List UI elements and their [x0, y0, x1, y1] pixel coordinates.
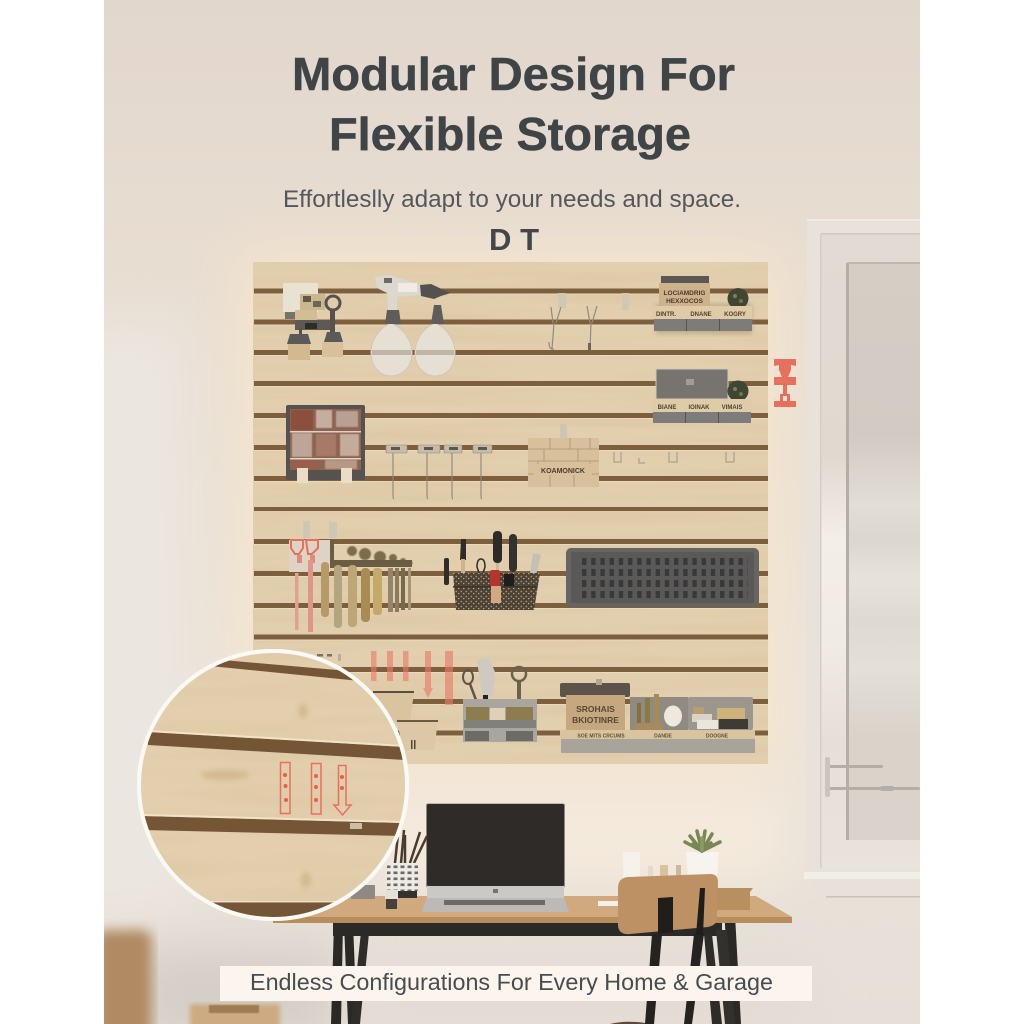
item: clamps and scrapers	[283, 283, 343, 360]
desk	[273, 888, 792, 1024]
item: four wire hooks	[386, 445, 492, 499]
item: upper shelf: DINTR.	[656, 312, 676, 318]
potted plant and vase	[623, 831, 720, 878]
item: grey perforated tray	[566, 548, 759, 607]
item: lower shelf: VIMAIS	[722, 405, 742, 411]
wood knots	[201, 704, 311, 888]
small dark fixings	[317, 654, 341, 661]
blurred foreground boxes	[96, 930, 645, 1024]
item: upper shelf	[652, 276, 752, 334]
magnified slots	[143, 658, 405, 925]
magnified red strips	[280, 762, 351, 815]
laptop	[422, 804, 569, 912]
pencil cup	[351, 830, 427, 909]
item: three-bin organizer: DOOGNE	[706, 734, 729, 740]
item: lower shelf: IOINAK	[688, 405, 710, 411]
item: three-bin organizer: DANDE	[654, 734, 673, 740]
item: lower shelf	[652, 369, 752, 423]
item: upper shelf: DNANE	[690, 312, 712, 318]
item: hanging tool rack	[321, 540, 412, 628]
door	[804, 219, 920, 898]
item: upper shelf: LOCIAMDRIG	[664, 290, 705, 297]
item: top row hooks	[549, 293, 629, 350]
chair	[618, 874, 722, 1024]
door handles	[825, 757, 920, 797]
item: three-bin organizer: SROHAIS	[576, 704, 615, 714]
item: three-bin organizer: BKIOTINRE	[572, 715, 619, 725]
item: brick-pattern box: KOAMONICK	[541, 468, 585, 475]
red mounting strip overlays	[371, 651, 453, 705]
title	[292, 48, 735, 160]
item: lower shelf: BIANE	[658, 405, 676, 411]
item: shears and knife holder	[463, 657, 537, 742]
item: scissors with red overlay	[289, 521, 337, 632]
item: three-bin organizer: SOE MITS CRCUMS	[577, 734, 625, 740]
item: upper shelf: KOGRY	[724, 312, 746, 318]
red mounting bracket icon	[774, 359, 796, 407]
bottom caption banner: Endless Configurations For Every Home & Garage	[250, 969, 773, 995]
item: spray tools with glass bulbs	[371, 275, 455, 376]
item: framed picture	[286, 405, 365, 483]
bottom caption banner	[220, 966, 812, 1001]
door sill	[804, 872, 920, 879]
item: brick-pattern box	[528, 424, 599, 487]
box on desk	[717, 888, 753, 910]
title: Modular Design For	[292, 48, 735, 100]
item: upper shelf: HEXXOCOS	[666, 298, 704, 305]
desktop	[273, 896, 792, 923]
item: pair of tan bins	[373, 691, 438, 750]
magnifier callout: slat detail	[137, 649, 409, 921]
panel: slat wall	[253, 262, 768, 764]
title: Flexible Storage	[329, 108, 691, 160]
subtitle: Effortleslly adapt to your needs and space.	[283, 186, 741, 213]
item: small hooks row	[614, 452, 734, 463]
item: mesh basket with tools	[444, 531, 541, 610]
stray label letters: D T	[489, 222, 539, 257]
item: three-bin organizer	[560, 679, 755, 753]
door glass panel	[847, 263, 920, 840]
